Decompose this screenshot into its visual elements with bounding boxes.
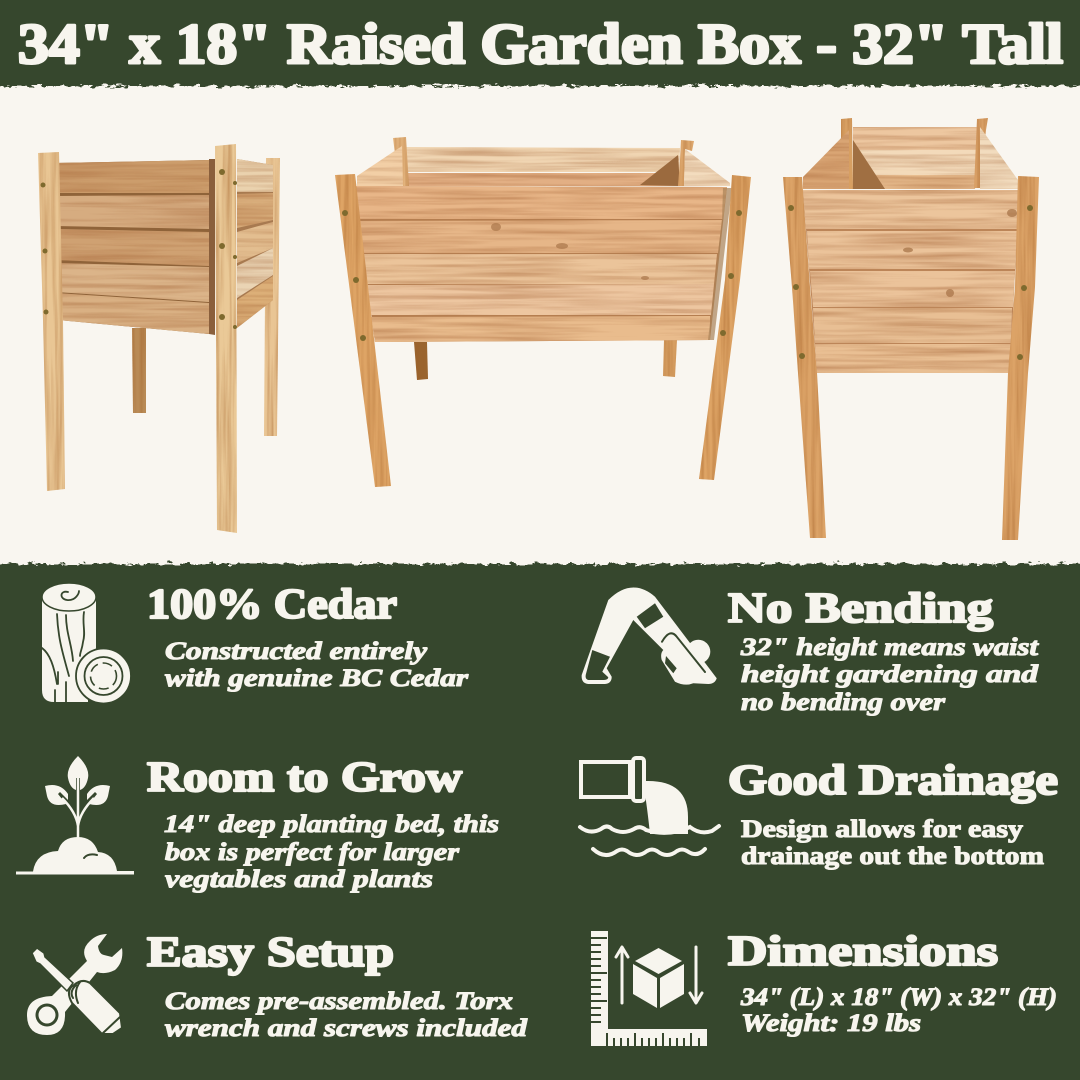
icon: bending figure: [582, 587, 717, 685]
description: [740, 634, 1039, 716]
heading: 100% Cedar: [147, 582, 397, 628]
description: vegtables and plants: [165, 866, 433, 893]
description: with genuine BC Cedar: [165, 665, 468, 692]
description: 14" deep planting bed, this: [164, 811, 499, 838]
description: [165, 988, 528, 1042]
heading: Good Drainage: [728, 758, 1058, 804]
icon: crossed tools: [27, 934, 122, 1035]
description: [740, 984, 1057, 1037]
icon: drain pipe: [580, 758, 719, 855]
photo: raised garden box, long side view: [335, 137, 751, 487]
title: 34" x 18" Raised Garden Box - 32" Tall: [18, 13, 1063, 76]
description: Weight: 19 lbs: [741, 1010, 921, 1037]
description: drainage out the bottom: [741, 843, 1044, 870]
description: [741, 816, 1044, 870]
feature: Room to Grow: [16, 755, 499, 893]
icon: ruler and cube: [591, 931, 707, 1046]
icon: sprout: [16, 756, 134, 874]
photo: raised garden box, corner view: [38, 144, 280, 533]
description: Constructed entirely: [165, 638, 428, 665]
description: Design allows for easy: [741, 816, 1024, 843]
description: 34" (L) x 18" (W) x 32" (H): [740, 984, 1057, 1011]
description: box is perfect for larger: [165, 839, 459, 866]
description: [165, 638, 468, 692]
heading: Easy Setup: [147, 930, 394, 976]
feature: No Bending: [582, 586, 1039, 716]
screws: [40, 169, 237, 329]
description: [164, 811, 499, 893]
heading: Dimensions: [728, 929, 998, 975]
lower features panel with torn edge: [0, 564, 1080, 1080]
feature: Dimensions: [591, 929, 1057, 1046]
description: no bending over: [741, 689, 945, 716]
feature: Good Drainage: [580, 758, 1058, 870]
description: wrench and screws included: [165, 1015, 528, 1042]
heading: Room to Grow: [147, 755, 463, 801]
feature: Easy Setup: [27, 930, 528, 1042]
knots: [903, 209, 1017, 297]
feature: 100% Cedar: [42, 582, 468, 704]
icon: logs: [42, 583, 131, 704]
description: height gardening and: [741, 661, 1039, 688]
photo: raised garden box, short side view: [783, 118, 1039, 540]
heading: No Bending: [728, 586, 993, 632]
description: Comes pre-assembled. Torx: [165, 988, 513, 1015]
knots: [491, 223, 649, 280]
description: 32" height means waist: [740, 634, 1039, 661]
header band with torn edge: [0, 0, 1080, 86]
